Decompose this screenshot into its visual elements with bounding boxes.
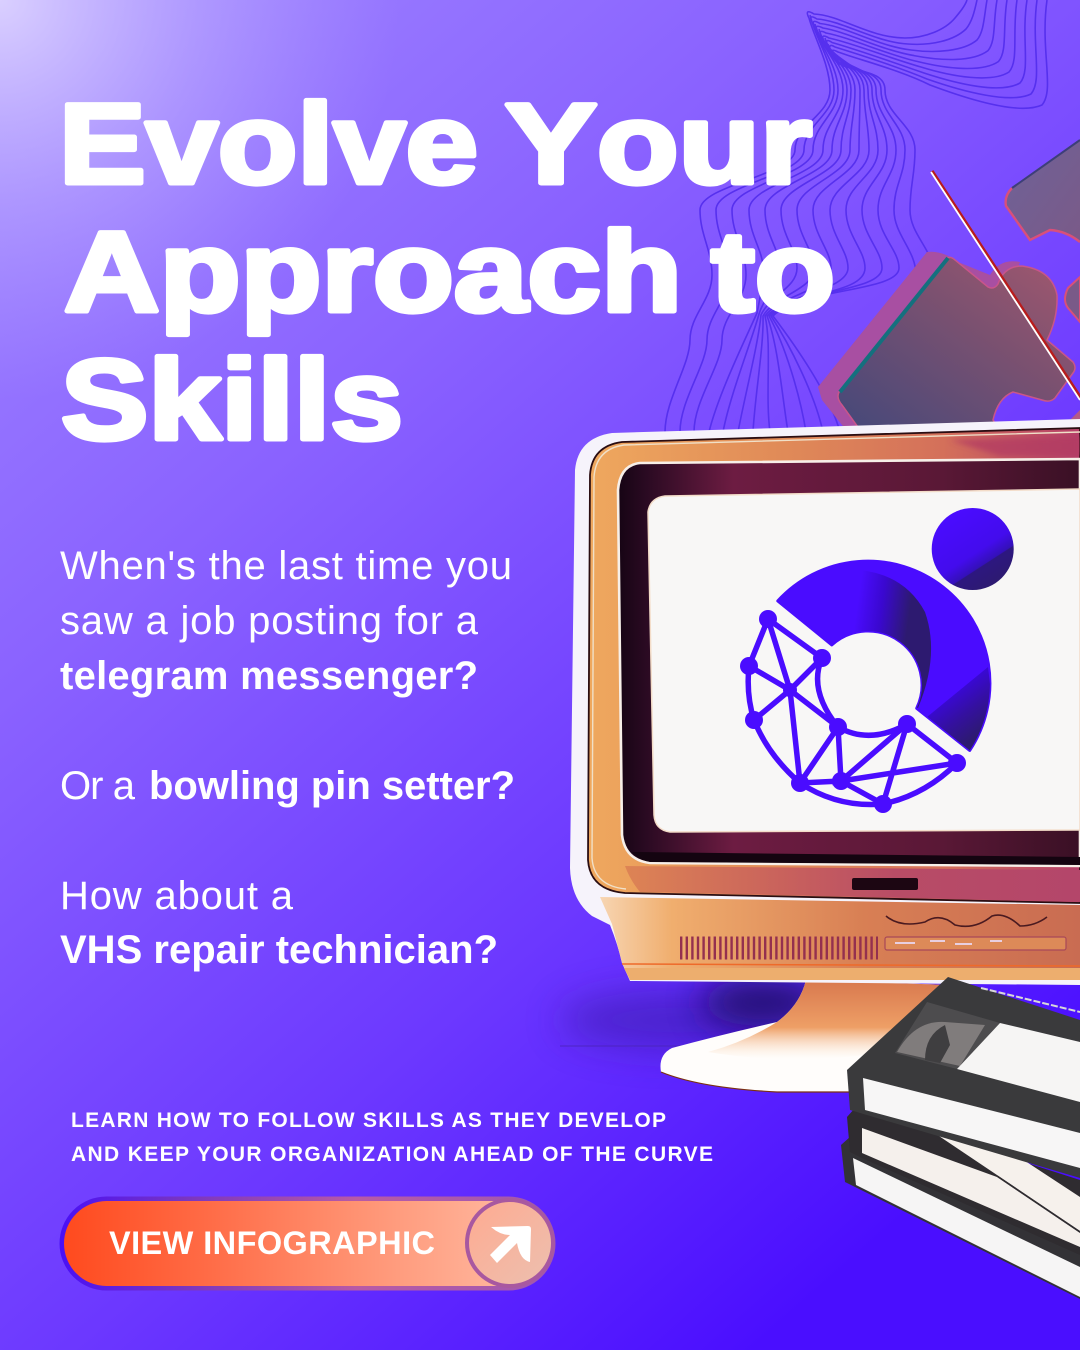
logo: network mesh xyxy=(748,619,957,805)
button circle xyxy=(467,1200,553,1286)
title: Approach xyxy=(64,209,682,336)
tape 1 top label xyxy=(957,1023,1080,1102)
icon: arrow xyxy=(490,1226,531,1263)
vents xyxy=(680,936,878,960)
control panel xyxy=(885,937,1066,950)
title: to xyxy=(711,209,835,336)
frame inner red line xyxy=(592,432,1080,889)
puzzle piece: teal edge xyxy=(840,258,948,392)
intro text block: Or a xyxy=(60,764,136,808)
power slot xyxy=(852,878,918,890)
intro text block: bowling pin setter? xyxy=(149,764,515,808)
monitor lower body xyxy=(600,897,1080,980)
tape 3 xyxy=(841,1128,1080,1299)
title: Y xyxy=(505,81,597,208)
VHS tape stack xyxy=(841,977,1080,1299)
tape 1 spine label xyxy=(863,1078,1080,1168)
call to action text: AND KEEP YOUR ORGANIZATION AHEAD OF THE CURVE xyxy=(71,1143,713,1166)
bezel bottom shadow xyxy=(632,852,1080,865)
wave line pattern xyxy=(665,0,1048,432)
tape 1 edge print xyxy=(981,988,1080,1012)
logo xyxy=(740,508,1014,813)
logo: head circle xyxy=(932,508,1014,590)
tape 1 reel xyxy=(897,1022,985,1066)
call to action text: LEARN HOW TO FOLLOW SKILLS AS THEY DEVELOP xyxy=(71,1109,666,1132)
title: Skills xyxy=(61,337,403,464)
button: view infographic xyxy=(62,1199,553,1288)
puzzle piece: right fragment xyxy=(1065,277,1080,322)
button: view infographic: VIEW INFOGRAPHIC xyxy=(109,1225,435,1261)
title: our xyxy=(597,81,812,208)
tape 2 xyxy=(847,1108,1080,1255)
frame top highlight xyxy=(950,436,1080,456)
dark bezel xyxy=(618,459,1080,866)
white sticker outline xyxy=(570,419,1080,985)
title xyxy=(59,81,835,464)
panel highlights xyxy=(895,941,1002,944)
intro text block: telegram messenger? xyxy=(60,654,478,698)
puzzle pieces xyxy=(818,140,1080,430)
intro text block: saw a job posting for a xyxy=(60,599,479,643)
tape 1 window xyxy=(895,1002,1000,1069)
retro TV monitor xyxy=(570,419,1080,1092)
intro text block: When's the last time you xyxy=(60,544,512,588)
frame bottom strip xyxy=(625,866,1080,902)
puzzle piece: large top face xyxy=(838,257,1075,430)
puzzle piece: lower right fragment xyxy=(1070,410,1080,420)
intro text block: VHS repair technician? xyxy=(60,928,498,972)
logo: network nodes xyxy=(740,610,966,813)
monitor stand xyxy=(660,980,950,1092)
monitor front frame xyxy=(588,428,1080,903)
call to action text xyxy=(71,1109,713,1166)
screen xyxy=(648,489,1080,832)
needle xyxy=(931,171,1080,400)
puzzle piece: large side face xyxy=(818,252,1020,430)
tape 1 reel hub xyxy=(925,1025,950,1063)
intro text block xyxy=(60,544,515,972)
puzzle piece: upper right xyxy=(1006,140,1080,242)
intro text block: How about a xyxy=(60,874,294,918)
wave emboss xyxy=(886,915,1047,926)
tape 1 xyxy=(847,977,1080,1178)
monitor shadow xyxy=(560,978,830,1050)
logo: solid arc xyxy=(776,560,992,752)
title: Evolve xyxy=(59,81,478,208)
